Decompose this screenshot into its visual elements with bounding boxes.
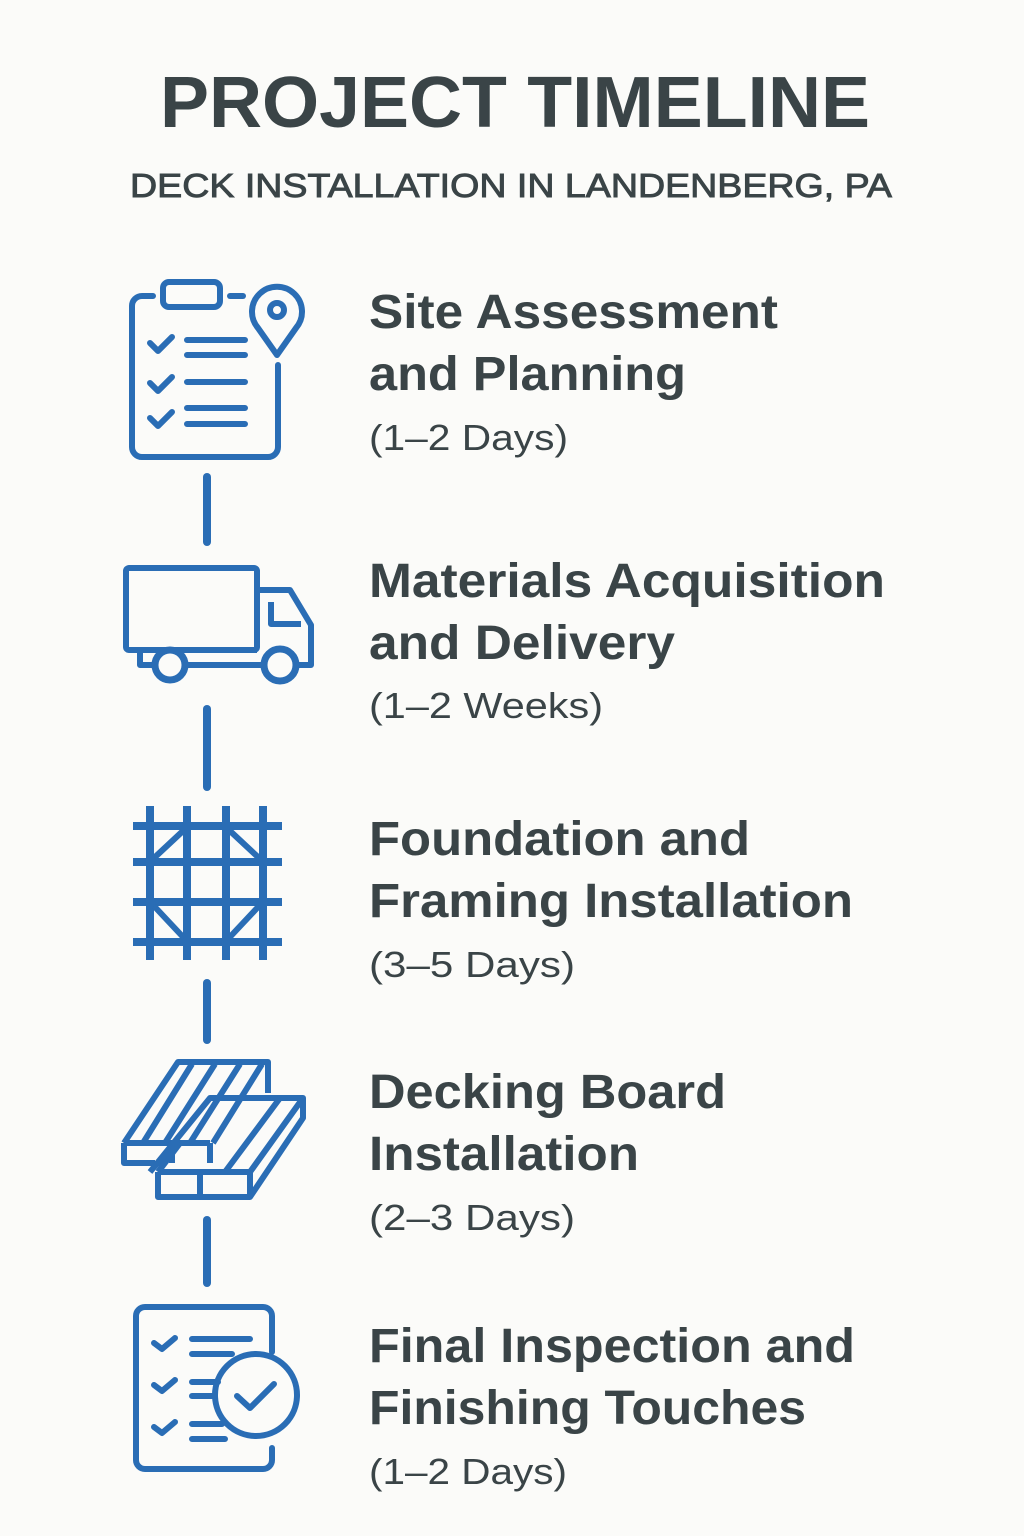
text block: step 2: and Delivery [369, 617, 675, 670]
text block: step 2: (1–2 Weeks) [369, 685, 603, 726]
text block: step 2 [369, 555, 885, 726]
text block: step 5: (1–2 Days) [369, 1451, 567, 1492]
title: PROJECT TIMELINE [160, 63, 870, 143]
text block: step 5: Final Inspection and [369, 1320, 855, 1373]
arrow: connector 2 [203, 709, 211, 787]
text block: step 1: Site Assessment [369, 286, 778, 339]
text block: step 3: Framing Installation [369, 875, 853, 928]
icon: clipboard with location pin [132, 282, 302, 457]
subtitle: DECK INSTALLATION IN LANDENBERG, PA [130, 167, 892, 204]
text block: step 3 [369, 813, 853, 985]
text block: step 4 [369, 1066, 726, 1238]
text block: step 2: Materials Acquisition [369, 555, 885, 608]
text block: step 1: and Planning [369, 348, 686, 401]
icon: truck [126, 568, 311, 681]
text block: step 4: (2–3 Days) [369, 1197, 575, 1238]
icon: checklist with check circle [136, 1307, 297, 1469]
icon: framing grid [133, 806, 282, 960]
text block: step 5 [369, 1320, 855, 1492]
icon: decking boards [124, 1062, 303, 1197]
text block: step 1 [369, 286, 778, 458]
text block: step 5: Finishing Touches [369, 1382, 806, 1435]
text block: step 3: Foundation and [369, 813, 750, 866]
text block: step 4: Decking Board [369, 1066, 726, 1119]
text block: step 1: (1–2 Days) [369, 417, 568, 458]
text block: step 4: Installation [369, 1128, 639, 1181]
arrow: connector 4 [203, 1220, 211, 1283]
arrow: connector 3 [203, 983, 211, 1040]
text block: step 3: (3–5 Days) [369, 944, 575, 985]
arrow: connector 1 [203, 477, 211, 542]
